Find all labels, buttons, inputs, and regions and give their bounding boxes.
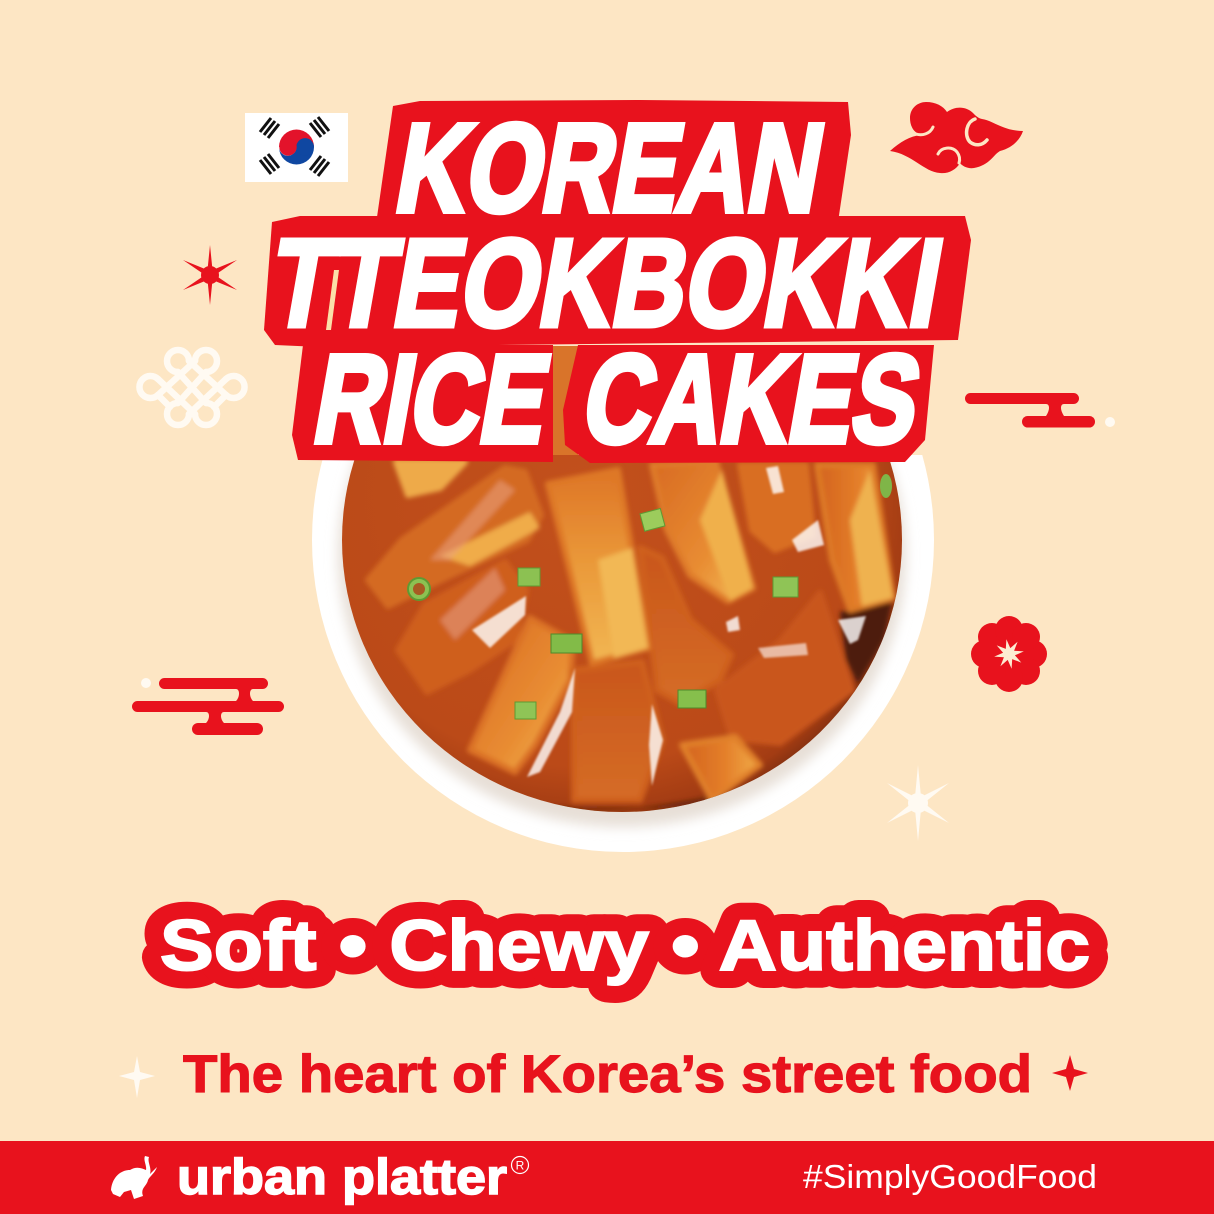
- icon: small white sparkle: [119, 1056, 155, 1098]
- icon: elephant logo: [111, 1156, 157, 1199]
- taegeuk: [279, 130, 314, 164]
- title outline blob: [264, 100, 971, 463]
- brand name: urban platter: [177, 1149, 507, 1205]
- photo: bowl of tteokbokki: [312, 455, 934, 852]
- sliver between the Ts: [326, 270, 339, 330]
- icon: cloud lines left: [132, 678, 284, 735]
- subheading: The heart of Korea’s street food: [183, 1045, 1032, 1104]
- icon: small red sparkle: [1052, 1055, 1088, 1091]
- title: Korean Tteokbokki Rice Cakes: [261, 98, 971, 469]
- title line 1: KOREAN: [387, 98, 834, 238]
- bowl: [312, 455, 934, 852]
- sauce glints: [472, 466, 866, 786]
- scallion ring: [408, 578, 430, 600]
- sauce: [342, 455, 902, 812]
- registered mark: [512, 1156, 528, 1174]
- icon: endless knot: [139, 350, 245, 425]
- icon: red star: [183, 245, 237, 305]
- scallions: [408, 474, 892, 719]
- footer bar: [0, 1141, 1214, 1214]
- bowl inner wall: [334, 460, 910, 832]
- icon: Korean flag: [245, 113, 348, 182]
- cloud swirls: [916, 119, 987, 163]
- title line 3 left: RICE: [305, 329, 560, 469]
- icon: cloud: [890, 102, 1023, 173]
- trigrams: [260, 117, 329, 176]
- icon: cloud lines right: [965, 393, 1115, 428]
- hashtag: #SimplyGoodFood: [803, 1158, 1097, 1195]
- tagline outline: Soft • Chewy • Authentic: [160, 907, 1090, 986]
- tagline text: Soft • Chewy • Authentic: [160, 907, 1090, 986]
- title line 2: TTEOKBOKKI: [261, 213, 953, 353]
- food showing through title gap: [552, 346, 578, 466]
- icon: white sparkle: [887, 765, 949, 841]
- title line 3 right: CAKES: [574, 329, 931, 469]
- rice cakes: [368, 462, 893, 810]
- icon: red flower: [971, 616, 1047, 692]
- registered mark: R: [516, 1158, 525, 1172]
